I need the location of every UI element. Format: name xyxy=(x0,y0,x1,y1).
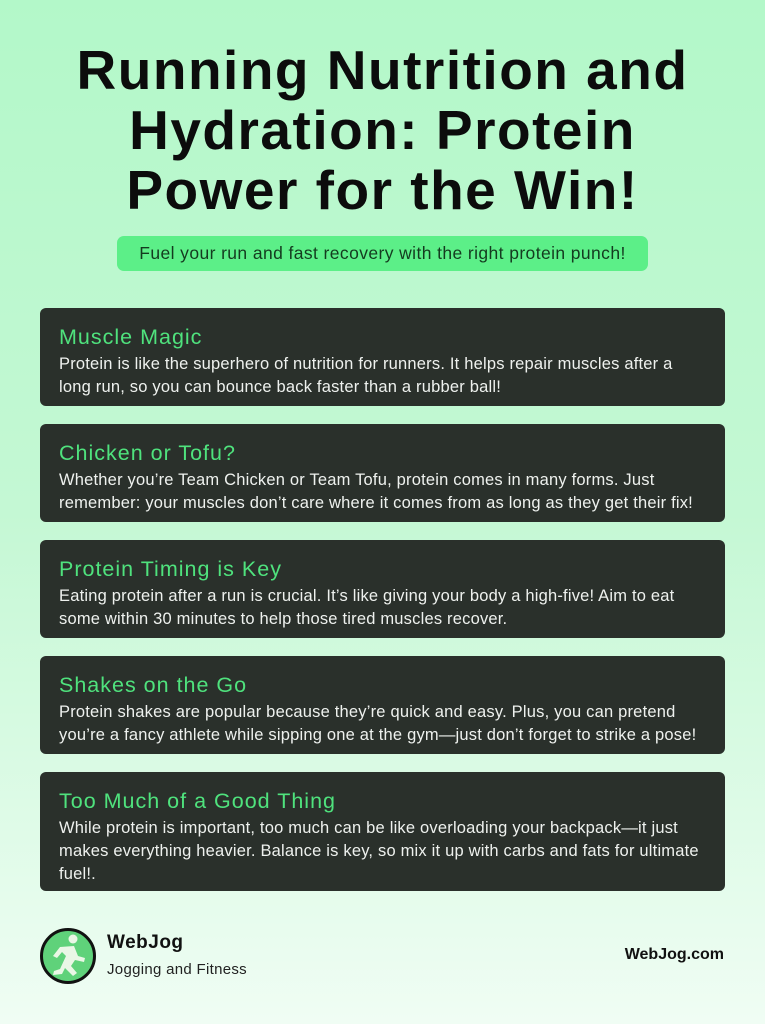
heading: Too Much of a Good Thing xyxy=(59,789,336,813)
text: Whether you’re Team Chicken or Team Tofu, protein comes in many forms. Just xyxy=(59,471,654,489)
title: Power for the Win! xyxy=(126,159,639,221)
heading: Protein Timing is Key xyxy=(59,557,282,581)
title: Running Nutrition and xyxy=(77,39,688,101)
tagline: Jogging and Fitness xyxy=(107,961,247,978)
panel: shakes xyxy=(40,656,725,754)
panel: chicken or tofu xyxy=(40,424,725,522)
text: some within 30 minutes to help those tired muscles recover. xyxy=(59,610,507,628)
text xyxy=(59,819,699,883)
panel: too much xyxy=(40,772,725,891)
icon: logo runner xyxy=(40,928,96,984)
subtitle pill: Fuel your run and fast recovery with the right protein punch! xyxy=(139,243,626,263)
text: Protein is like the superhero of nutrition for runners. It helps repair muscles after a xyxy=(59,355,673,373)
text xyxy=(59,355,673,396)
text: you’re a fancy athlete while sipping one at the gym—just don’t forget to strike a pose! xyxy=(59,726,696,744)
text: makes everything heavier. Balance is key, so mix it up with carbs and fats for ultimate xyxy=(59,842,699,860)
subtitle pill xyxy=(117,236,648,271)
title xyxy=(77,39,688,221)
text: remember: your muscles don’t care where it comes from as long as they get their fix! xyxy=(59,494,693,512)
text xyxy=(59,587,674,628)
text xyxy=(59,703,696,744)
heading: Shakes on the Go xyxy=(59,673,247,697)
website: WebJog.com xyxy=(625,946,724,963)
text xyxy=(59,471,693,512)
heading: Muscle Magic xyxy=(59,325,202,349)
heading: Chicken or Tofu? xyxy=(59,441,236,465)
text: fuel!. xyxy=(59,865,96,883)
panel: timing xyxy=(40,540,725,638)
title: Hydration: Protein xyxy=(129,99,636,161)
text: Eating protein after a run is crucial. It’s like giving your body a high-five! Aim to eat xyxy=(59,587,674,605)
panel: muscle magic xyxy=(40,308,725,406)
brand name: WebJog xyxy=(107,932,184,953)
text: Protein shakes are popular because they’re quick and easy. Plus, you can pretend xyxy=(59,703,675,721)
text: While protein is important, too much can be like overloading your backpack—it just xyxy=(59,819,678,837)
text: long run, so you can bounce back faster than a rubber ball! xyxy=(59,378,501,396)
